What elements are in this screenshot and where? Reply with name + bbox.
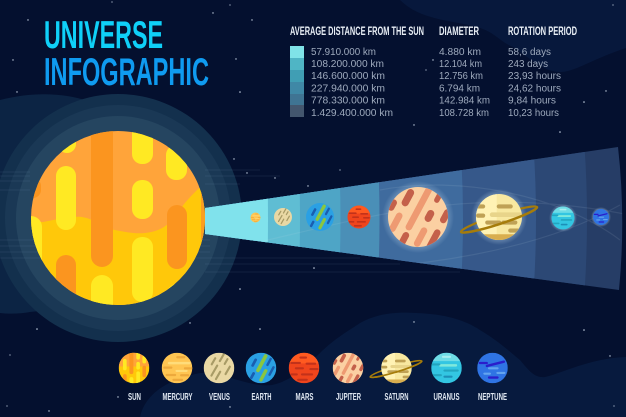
diameter values [439,47,490,119]
data table [290,26,577,119]
jupiter in beam [373,172,459,262]
neptune in beam [591,207,611,227]
diameter values: 4.880 km [439,47,481,58]
table headings: ROTATION PERIOD [508,26,577,38]
distance values: 108.200.000 km [311,59,384,70]
planet legend [119,345,508,403]
distance values: 1.429.400.000 km [311,108,393,119]
title: UNIVERSE [44,14,163,57]
legend: uranus: URANUS [434,391,460,403]
mars in beam [348,206,370,228]
rotation values: 23,93 hours [508,71,561,82]
legend: neptune: NEPTUNE [478,391,507,403]
diameter values: 12.104 km [439,59,482,70]
title [44,14,209,94]
title: INFOGRAPHIC [44,51,209,94]
legend: jupiter [325,345,369,403]
venus in beam [274,206,293,226]
distance values: 57.910.000 km [311,47,376,58]
table headings: DIAMETER [439,26,479,38]
distance values [311,47,393,119]
distance values: 778.330.000 km [311,96,385,106]
legend: saturn [369,353,423,403]
legend: sun [119,348,149,403]
distance values: 227.940.000 km [311,84,385,94]
legend: venus: VENUS [209,391,230,403]
diameter values: 12.756 km [439,71,483,82]
rotation values: 58,6 days [508,47,551,58]
legend: jupiter: JUPITER [336,391,361,403]
large sun [31,131,205,305]
uranus in beam [549,204,577,232]
legend: earth [245,350,278,403]
sun yellow bars [31,132,187,305]
legend: neptune [477,353,508,403]
legend: saturn: SATURN [384,391,408,403]
legend: uranus [431,353,462,403]
diameter values: 142.984 km [439,96,490,106]
earth in beam [306,201,336,234]
rotation values: 9,84 hours [508,96,556,106]
mercury in beam [250,212,261,222]
light beam [205,147,622,290]
diameter values: 6.794 km [439,84,480,94]
sun orange bars [33,131,187,294]
rotation values: 24,62 hours [508,84,561,94]
saturn in beam [460,189,538,245]
rotation values: 10,23 hours [508,108,559,119]
distance values: 146.600.000 km [311,71,385,82]
diameter values: 108.728 km [439,108,489,119]
sun halo [0,94,242,342]
rotation values: 243 days [508,59,548,70]
legend: mercury [162,353,193,403]
legend: earth: EARTH [252,391,272,403]
table headings: AVERAGE DISTANCE FROM THE SUN [290,26,424,38]
beam segments [205,147,622,290]
legend: mars: MARS [296,391,314,403]
legend: sun: SUN [128,391,141,403]
legend swatch [290,46,304,117]
legend: mars [289,353,319,403]
orbit lines [0,170,460,272]
rotation values [508,47,561,119]
legend: mercury: MERCURY [162,391,192,403]
legend: venus [204,349,236,403]
